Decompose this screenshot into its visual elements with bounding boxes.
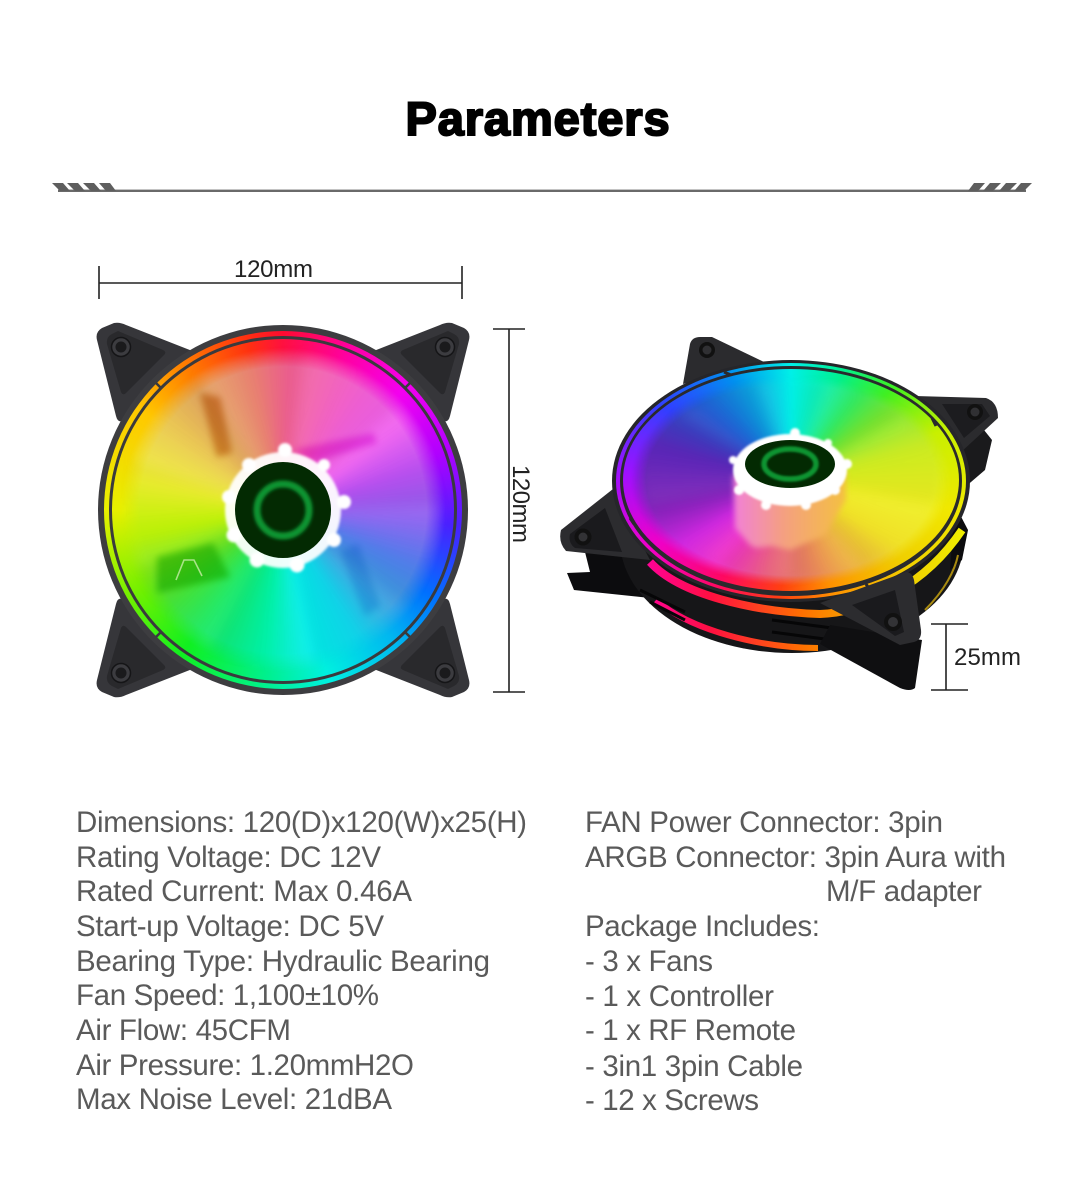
outer led ring [616,363,966,599]
connectors and package list: - 3in1 3pin Cable [585,1050,803,1083]
specifications list: Dimensions: 120(D)x120(W)x25(H) [76,806,527,839]
specifications list: Start-up Voltage: DC 5V [76,910,384,943]
depth dimension: 25mm [931,623,1021,691]
connectors and package list: - 1 x RF Remote [585,1014,796,1047]
blade colour wheel [630,374,952,586]
fan frame [612,360,970,602]
hub column [733,470,846,550]
back right mount [915,396,998,453]
title divider [52,183,1032,192]
inner led glow [623,369,959,591]
blade colour wheel [120,347,446,673]
fan angled view [560,337,998,690]
width dimension: 120mm [98,256,463,299]
hub ring [729,428,852,510]
blade streak shading [126,353,440,667]
fan body and lower mounts [560,337,998,653]
specifications list: Air Pressure: 1.20mmH2O [76,1049,414,1082]
blade streak shading [642,382,940,578]
rim details, hub and mounts [628,371,938,690]
connectors and package list: - 3 x Fans [585,945,713,978]
fan hub [220,441,353,574]
main body [620,427,964,653]
title: Parameters [405,92,671,145]
connectors and package list [585,806,1006,1117]
specifications list [76,806,527,1116]
body slats [640,590,832,640]
rear mount under-layers [950,400,992,500]
width dimension: 120mm: 120mm [234,256,313,283]
specifications list: Max Noise Level: 21dBA [76,1083,392,1116]
connectors and package list: ARGB Connector: 3pin Aura with [585,841,1006,874]
blade logo mark and ring gaps [156,382,410,638]
lower led stripes [656,600,818,648]
connectors and package list: Package Includes: [585,910,820,943]
specifications list: Rating Voltage: DC 12V [76,841,381,874]
front mount [820,625,922,690]
specifications list: Fan Speed: 1,100±10% [76,979,379,1012]
depth dimension: 25mm: 25mm [954,644,1021,671]
back left mount [683,337,764,384]
dark separator ring [109,336,457,684]
height dimension: 120mm [493,328,534,693]
fan front view [96,322,470,698]
ring gaps [630,372,936,590]
outer led ring [104,331,462,689]
specifications list: Air Flow: 45CFM [76,1014,291,1047]
connectors and package list: M/F adapter [826,875,982,908]
specifications list: Rated Current: Max 0.46A [76,875,412,908]
inner led glow [112,339,454,681]
connectors and package list: - 1 x Controller [585,980,774,1013]
height dimension: 120mm: 120mm [507,465,534,543]
fan frame [98,325,468,695]
connectors and package list: FAN Power Connector: 3pin [585,806,943,839]
left mount [560,489,650,560]
specifications list: Bearing Type: Hydraulic Bearing [76,945,490,978]
dark separator ring [620,366,962,596]
fan blade shadows [154,391,380,615]
connectors and package list: - 12 x Screws [585,1084,759,1117]
fan mounting corners [96,322,470,698]
